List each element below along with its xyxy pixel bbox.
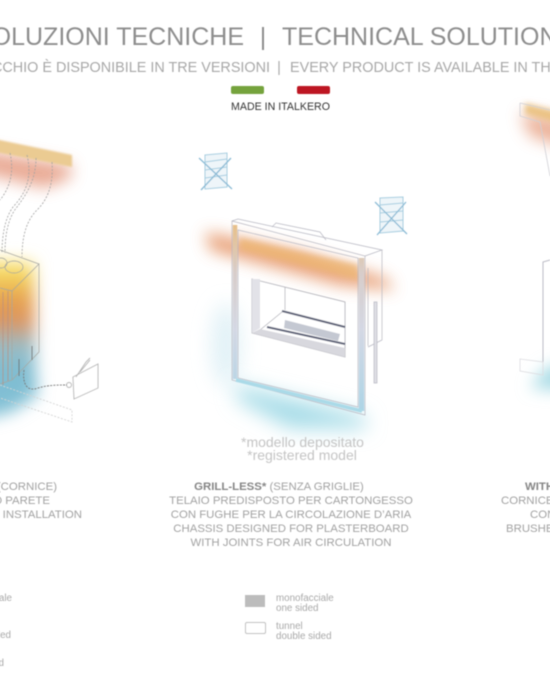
heat glow center: [205, 232, 395, 428]
text: grill-less description: WITH JOINTS FOR AIR CIRCULATION: [190, 537, 392, 549]
title: [0, 23, 550, 51]
legend center: monofacciale: [276, 593, 334, 604]
vent and connection left: [0, 358, 98, 422]
product: framed fireplace (right): [520, 103, 550, 392]
legend center: tunnel: [276, 621, 303, 632]
swatch: one sided: [245, 595, 265, 607]
firebox opening center: [252, 279, 345, 357]
caption: registered model: [241, 434, 364, 463]
text: grill-less description: TELAIO PREDISPOSTO PER CARTONGESSO: [169, 495, 413, 507]
subtitle: [0, 59, 550, 76]
swatch: double sided: [246, 622, 266, 634]
text: left description: INSTALLATION: [3, 509, 82, 521]
frame center: [232, 219, 382, 415]
frame outline right: [520, 103, 550, 375]
text: grill-less description: GRILL-LESS* (SENZA GRIGLIE): [194, 481, 364, 493]
text: right description: [501, 481, 550, 535]
caption: registered model: *modello depositato: [241, 434, 364, 450]
legend center: one sided: [276, 603, 318, 614]
made in italkero logo: MADE IN ITALKERO: [231, 101, 330, 113]
heat glow left: [0, 136, 72, 422]
text: left description: [0, 481, 82, 521]
heat glow right: [520, 103, 550, 392]
firebox outline left: [0, 250, 39, 385]
legend left: [0, 593, 13, 669]
text: grill-less description: CHASSIS DESIGNED FOR PLASTERBOARD: [173, 523, 409, 535]
icon: crossed out grille right: [375, 197, 407, 235]
legend center: [245, 593, 334, 642]
subtitle: |: [277, 60, 281, 76]
product: grill-less fireplace (center): [199, 153, 407, 463]
legend center: double sided: [276, 631, 332, 642]
text: grill-less description: CON FUGHE PER LA CIRCOLAZIONE D’ARIA: [171, 509, 412, 521]
title: |: [260, 23, 266, 51]
ducts dashed left: [0, 153, 52, 257]
made in italkero logo: [231, 86, 330, 113]
product: framed fireplace (left): [0, 136, 98, 422]
text: grill-less description: [169, 481, 413, 549]
caption: registered model: *registered model: [247, 447, 357, 463]
icon: crossed out grille left: [199, 153, 232, 190]
